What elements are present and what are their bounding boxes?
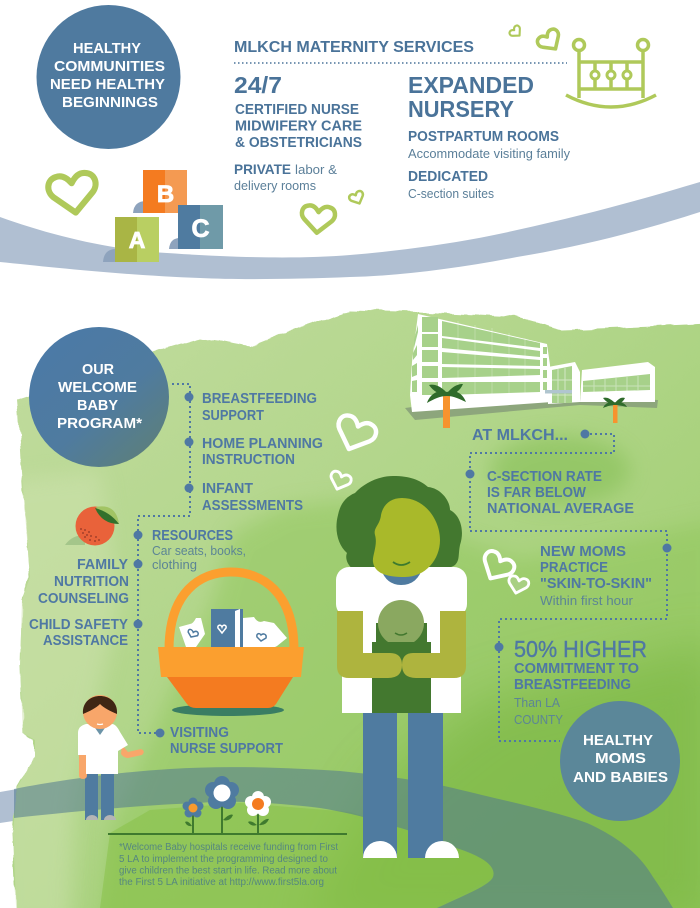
text block: private rooms: delivery rooms	[234, 178, 316, 193]
top band: blue-grey swoosh	[0, 182, 700, 279]
text block: child safety assistance	[29, 617, 142, 649]
icon: orange fruit	[65, 506, 119, 546]
text block: c-section rate: C-SECTION RATE	[487, 469, 602, 485]
footnote: *Welcome Baby hospitals receive funding from First	[119, 842, 338, 853]
heading: maternity services: MLKCH MATERNITY SERVICES	[234, 39, 474, 56]
circle: welcome baby program: PROGRAM*	[57, 415, 142, 432]
footnote: 5 LA to implement the programming designed to	[119, 854, 328, 865]
list: welcome baby services: INFANT	[202, 481, 253, 497]
icon: alphabet blocks	[103, 170, 223, 262]
text block: resources: Car seats, books,	[152, 544, 246, 558]
circle: welcome baby program: WELCOME	[58, 379, 137, 396]
text block: 50 percent higher: COUNTY	[514, 712, 563, 727]
text block: family nutrition counseling: FAMILY	[77, 557, 128, 573]
icon: hospital building	[405, 314, 658, 420]
circle: healthy communities: NEED HEALTHY	[50, 76, 165, 93]
icon: heart large left	[47, 171, 99, 216]
connector: left dotted path	[138, 384, 190, 733]
circle: healthy communities: BEGINNINGS	[62, 94, 158, 111]
text block: private rooms: PRIVATE	[234, 161, 291, 177]
figure: visiting nurse	[78, 695, 144, 820]
text block: visiting nurse support	[156, 725, 283, 757]
text block: 24/7 care	[234, 72, 362, 151]
text block: c-section rate	[466, 469, 634, 517]
icon: crib	[566, 40, 656, 107]
panel: green watercolour wash	[0, 310, 700, 908]
text block: expanded nursery: NURSERY	[408, 96, 514, 122]
text block: expanded nursery	[408, 72, 534, 122]
circle: healthy moms and babies	[560, 701, 680, 821]
text block: resources	[134, 528, 246, 572]
circle: healthy moms and babies: AND BABIES	[573, 769, 668, 786]
text block: dedicated suites	[408, 169, 494, 201]
text block: dedicated suites: DEDICATED	[408, 169, 488, 185]
text block: child safety assistance: CHILD SAFETY	[29, 617, 128, 633]
circle: healthy moms and babies: MOMS	[595, 750, 646, 767]
circle: welcome baby program	[29, 327, 169, 467]
icon: gift basket	[158, 572, 304, 716]
text block: resources: RESOURCES	[152, 528, 233, 544]
text block: postpartum rooms: Accommodate visiting family	[408, 146, 570, 161]
text block: visiting nurse support: VISITING	[170, 725, 229, 741]
icon: alphabet blocks: C	[191, 215, 210, 243]
text block: 50 percent higher: 50% HIGHER	[514, 636, 647, 662]
baby shirt	[243, 617, 287, 647]
text block: 24/7 care: 24/7	[234, 72, 282, 98]
list: welcome baby services: INSTRUCTION	[202, 452, 295, 468]
text block: family nutrition counseling: COUNSELING	[38, 591, 129, 607]
footnote	[119, 842, 338, 888]
icon: alphabet blocks: B	[157, 181, 174, 208]
icon: heart top small	[508, 24, 524, 40]
list: welcome baby services: BREASTFEEDING	[202, 391, 317, 407]
circle: healthy communities	[36, 5, 180, 149]
circle: healthy communities: COMMUNITIES	[54, 58, 165, 75]
text block: skin-to-skin: Within first hour	[540, 594, 633, 608]
text block: c-section rate: IS FAR BELOW	[487, 485, 586, 501]
text block: expanded nursery: EXPANDED	[408, 72, 534, 98]
text block: skin-to-skin: NEW MOMS	[540, 544, 626, 560]
icon: white heart large	[331, 413, 379, 456]
text block: skin-to-skin	[540, 544, 672, 608]
text block: skin-to-skin: "SKIN-TO-SKIN"	[540, 576, 652, 592]
icon: heart middle	[300, 205, 336, 234]
circle: healthy communities: HEALTHY	[73, 40, 141, 57]
list: welcome baby services: HOME PLANNING	[202, 436, 323, 452]
circle: welcome baby program: BABY	[77, 397, 118, 414]
text block: postpartum rooms	[408, 129, 570, 161]
icon: palm tree small	[603, 398, 627, 423]
text block: 24/7 care: & OBSTETRICIANS	[235, 135, 362, 151]
road: winding path	[14, 767, 673, 908]
text block: c-section rate: NATIONAL AVERAGE	[487, 501, 634, 517]
text block: 24/7 care: MIDWIFERY CARE	[235, 118, 362, 134]
list: welcome baby services: ASSESSMENTS	[202, 498, 303, 514]
footnote: give children the best start in life. Read more about	[119, 866, 337, 876]
icon: flowers	[108, 776, 347, 834]
icon: heart small middle	[348, 190, 366, 206]
text block: family nutrition counseling: NUTRITION	[54, 574, 129, 590]
text block: at MLKCH: AT MLKCH...	[472, 427, 568, 444]
circle: welcome baby program: OUR	[82, 361, 114, 378]
icon: white heart small	[327, 470, 352, 493]
road under wash at far left	[0, 785, 40, 823]
book	[211, 609, 243, 648]
figure: mother holding baby	[336, 476, 467, 858]
text block: postpartum rooms: POSTPARTUM ROOMS	[408, 129, 559, 145]
icon: paired white hearts	[477, 548, 530, 596]
text block: child safety assistance: ASSISTANCE	[43, 633, 128, 649]
text block: 50 percent higher: COMMITMENT TO	[514, 661, 639, 677]
text block: visiting nurse support: NURSE SUPPORT	[170, 741, 283, 757]
icon: heart top medium	[535, 27, 565, 55]
circle: healthy moms and babies: HEALTHY	[583, 732, 653, 749]
list: welcome baby services: SUPPORT	[202, 408, 264, 424]
icon: palm tree large	[427, 384, 466, 428]
footnote: the First 5 LA initiative at http://www.first5la.org	[119, 877, 324, 888]
text block: family nutrition counseling	[38, 557, 142, 607]
text block: 50 percent higher	[494, 636, 647, 727]
text block: dedicated suites: C-section suites	[408, 186, 494, 201]
bib	[179, 618, 205, 647]
text block: 50 percent higher: Than LA	[514, 695, 560, 710]
text block: resources: clothing	[152, 558, 197, 572]
text block: 24/7 care: CERTIFIED NURSE	[235, 102, 359, 118]
text block: private rooms: labor &	[295, 162, 337, 177]
text block: 50 percent higher: BREASTFEEDING	[514, 677, 631, 693]
text block: skin-to-skin: PRACTICE	[540, 560, 608, 576]
list: welcome baby services	[184, 391, 323, 514]
connector: right dotted path	[470, 434, 667, 741]
text block: private rooms	[234, 161, 337, 193]
icon: alphabet blocks: A	[129, 227, 145, 253]
